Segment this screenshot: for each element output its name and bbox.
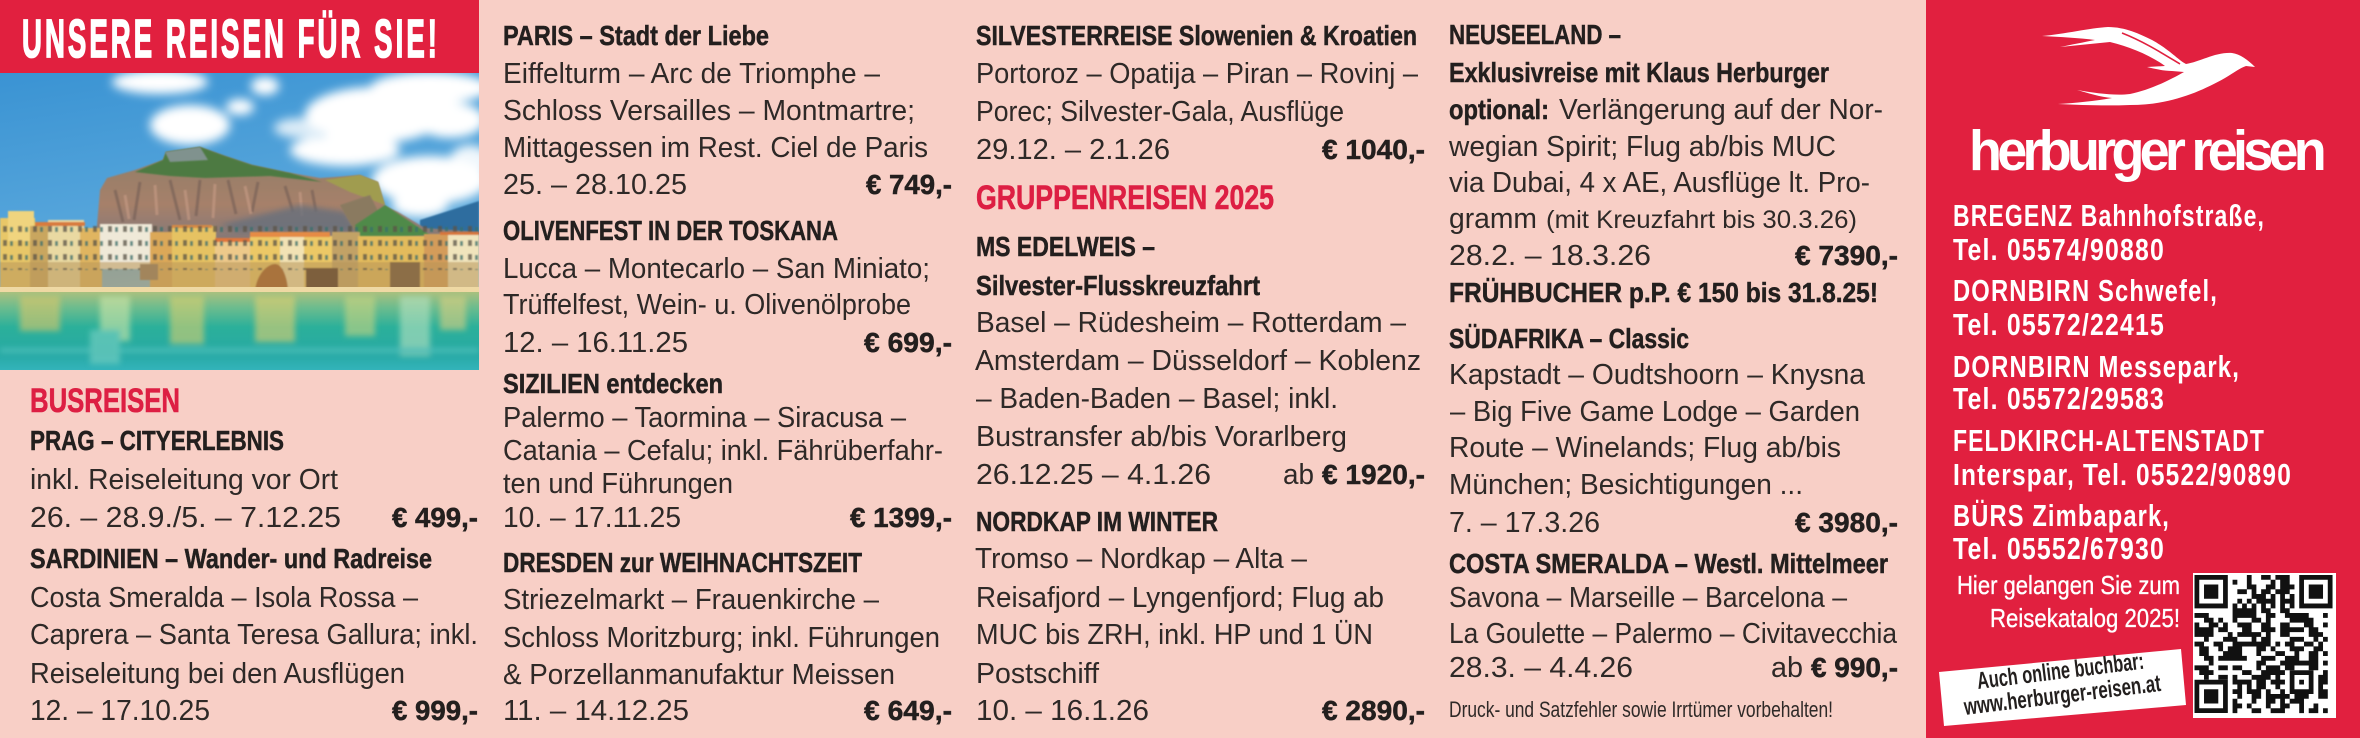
- trip: Neuseeland: € 7390,-: [1795, 240, 1898, 271]
- trip: Sardinien: [30, 543, 478, 727]
- trip: Neuseeland: gramm: [1449, 203, 1537, 235]
- trip: Prag: [30, 425, 478, 534]
- trip: Sardinien: Reiseleitung bei den Ausflügen: [30, 658, 405, 690]
- branch: Dornbirn Messepark: Tel. 05572/29583: [1953, 381, 2165, 416]
- trip: Sardinien: SARDINIEN – Wander- und Radreise: [30, 543, 432, 574]
- trip: MS Edelweis: ab: [1283, 459, 1314, 491]
- trip: Sizilien: Catania – Cefalu; inkl. Fährüberfahr-: [503, 435, 943, 467]
- trip: MS Edelweis: Amsterdam – Düsseldorf – Koblenz: [975, 345, 1421, 377]
- trip: Dresden: & Porzellanmanufaktur Meissen: [503, 659, 895, 691]
- trip: Südafrika: Kapstadt – Oudtshoorn – Knysna: [1449, 359, 1866, 391]
- trip: Paris: [503, 20, 952, 201]
- branch: Bregenz: [1953, 198, 2265, 267]
- trip: MS Edelweis: – Baden-Baden – Basel; inkl.: [976, 383, 1338, 415]
- branch: Bürs: BÜRS Zimbapark,: [1953, 498, 2170, 533]
- trip: Silvesterreise: Portoroz – Opatija – Piran – Rovinj –: [976, 58, 1419, 90]
- trip: Südafrika: € 3980,-: [1795, 507, 1898, 538]
- photo: Cefalù seafront under the cliff: [0, 70, 490, 370]
- branch: Bürs: [1953, 498, 2170, 566]
- logo wordmark: herburger reisen: [1969, 119, 2324, 183]
- branch: Dornbirn Messepark: DORNBIRN Messepark,: [1953, 349, 2240, 384]
- trip: MS Edelweis: MS EDELWEIS –: [976, 231, 1155, 262]
- trip: Costa Smeralda: 28.3. – 4.4.26: [1449, 652, 1633, 684]
- trip: Silvesterreise: SILVESTERREISE Slowenien & Kroatien: [976, 20, 1417, 51]
- catalog note: Hier gelangen Sie zum: [1957, 570, 2180, 600]
- trip: Paris: Eiffelturm – Arc de Triomphe –: [503, 58, 881, 90]
- trip: Olivenfest: OLIVENFEST IN DER TOSKANA: [503, 215, 838, 246]
- trip: MS Edelweis: Bustransfer ab/bis Vorarlberg: [976, 421, 1347, 453]
- trip: Südafrika: – Big Five Game Lodge – Garden: [1450, 396, 1860, 428]
- trip: Neuseeland: wegian Spirit; Flug ab/bis MUC: [1448, 131, 1836, 163]
- trip: Olivenfest: € 699,-: [864, 327, 952, 358]
- trip: Südafrika: Route – Winelands; Flug ab/bis: [1449, 432, 1841, 464]
- trip: Olivenfest: 12. – 16.11.25: [503, 327, 688, 359]
- trip: Nordkap: Tromso – Nordkap – Alta –: [975, 543, 1308, 575]
- trip: Paris: € 749,-: [866, 169, 952, 200]
- trip: Costa Smeralda: ab: [1771, 652, 1803, 684]
- trip: Silvesterreise: 29.12. – 2.1.26: [976, 134, 1170, 166]
- trip: Nordkap: Postschiff: [976, 658, 1100, 690]
- buildings: [0, 218, 35, 290]
- disclaimer: Druck- und Satzfehler sowie Irrtümer vorbehalten!: [1449, 697, 1833, 722]
- QR code: [2193, 573, 2336, 718]
- column 2: [503, 20, 952, 727]
- trip: Sardinien: 12. – 17.10.25: [30, 695, 210, 727]
- trip: Paris: 25. – 28.10.25: [503, 169, 687, 201]
- trip: Prag: PRAG – CITYERLEBNIS: [30, 425, 284, 456]
- trip: Südafrika: [1449, 323, 1898, 539]
- panel: red contact sidebar: [1926, 0, 2360, 738]
- trip: Costa Smeralda: COSTA SMERALDA – Westl. Mittelmeer: [1449, 548, 1888, 579]
- trip: Neuseeland: [1448, 19, 1898, 308]
- trip: Neuseeland: FRÜHBUCHER p.P. € 150 bis 31.8.25!: [1449, 277, 1878, 308]
- trip: Nordkap: NORDKAP IM WINTER: [976, 506, 1218, 537]
- trip: Paris: Mittagessen im Rest. Ciel de Paris: [503, 132, 928, 164]
- trip: Olivenfest: Trüffelfest, Wein- u. Olivenölprobe: [503, 289, 911, 321]
- trip: Sizilien: 10. – 17.11.25: [503, 502, 681, 534]
- branch: Dornbirn Schwefel: [1953, 273, 2218, 342]
- title banner: UNSERE REISEN FÜR SIE!: [22, 9, 440, 69]
- trip: Dresden: 11. – 14.12.25: [503, 695, 689, 727]
- catalog note: Reisekatalog 2025!: [1990, 603, 2180, 633]
- branch: Dornbirn Schwefel: Tel. 05572/22415: [1953, 307, 2165, 342]
- trip: Prag: 26. – 28.9./5. – 7.12.25: [30, 502, 341, 534]
- callout: online booking label: www.herburger-reisen.at: [1962, 670, 2162, 721]
- heading: Gruppenreisen 2025: GRUPPENREISEN 2025: [976, 179, 1274, 217]
- trip: Nordkap: MUC bis ZRH, inkl. HP und 1 ÜN: [976, 619, 1373, 651]
- heading: Busreisen: BUSREISEN: [30, 382, 180, 420]
- trip: Costa Smeralda: Savona – Marseille – Barcelona –: [1449, 582, 1848, 614]
- trip: Neuseeland: (mit Kreuzfahrt bis 30.3.26): [1546, 206, 1857, 234]
- column 1: Busreisen: [30, 382, 478, 727]
- trip: Neuseeland: NEUSEELAND –: [1449, 19, 1621, 50]
- trip: Prag: inkl. Reiseleitung vor Ort: [30, 464, 338, 496]
- trip: Sizilien: SIZILIEN entdecken: [503, 368, 723, 399]
- trip: MS Edelweis: 26.12.25 – 4.1.26: [976, 459, 1211, 491]
- trip: Dresden: [503, 547, 952, 727]
- trip: Silvesterreise: [976, 20, 1425, 166]
- trip: Neuseeland: Verlängerung auf der Nor-: [1559, 94, 1883, 126]
- trip: Neuseeland: via Dubai, 4 x AE, Ausflüge lt. Pro-: [1449, 167, 1870, 199]
- title banner: [0, 0, 479, 73]
- trip: Sardinien: Caprera – Santa Teresa Gallura; inkl.: [30, 619, 478, 651]
- catalog note: [1957, 570, 2180, 633]
- column 4: [1448, 19, 1898, 722]
- branch: Bürs: Tel. 05552/67930: [1953, 531, 2165, 566]
- trip: Nordkap: [975, 506, 1425, 727]
- trip: Costa Smeralda: [1449, 548, 1898, 684]
- trip: MS Edelweis: Silvester-Flusskreuzfahrt: [976, 270, 1260, 301]
- trip: Paris: Schloss Versailles – Montmartre;: [503, 95, 915, 127]
- trip: Dresden: Striezelmarkt – Frauenkirche –: [503, 584, 880, 616]
- trip: Nordkap: 10. – 16.1.26: [976, 695, 1149, 727]
- trip: Olivenfest: [503, 215, 952, 359]
- column 3: [975, 20, 1425, 727]
- trip: Neuseeland: optional:: [1449, 94, 1549, 125]
- trip: Costa Smeralda: € 990,-: [1811, 652, 1898, 683]
- trip: Dresden: Schloss Moritzburg; inkl. Führungen: [503, 622, 940, 654]
- trip: Silvesterreise: € 1040,-: [1322, 134, 1425, 165]
- trip: Südafrika: SÜDAFRIKA – Classic: [1449, 323, 1689, 354]
- trip: Dresden: DRESDEN zur WEIHNACHTSZEIT: [503, 547, 862, 578]
- trip: Costa Smeralda: La Goulette – Palermo – Civitavecchia: [1449, 618, 1898, 650]
- trip: Silvesterreise: Porec; Silvester-Gala, Ausflüge: [976, 96, 1344, 128]
- trip: Nordkap: Reisafjord – Lyngenfjord; Flug ab: [976, 582, 1384, 614]
- icon: herburger bird logo: [2042, 27, 2255, 105]
- trip: Sizilien: [503, 368, 952, 534]
- trip: Südafrika: 7. – 17.3.26: [1449, 507, 1600, 539]
- branch: Dornbirn Schwefel: DORNBIRN Schwefel,: [1953, 273, 2218, 308]
- trip: MS Edelweis: € 1920,-: [1322, 459, 1425, 490]
- trip: Neuseeland: Exklusivreise mit Klaus Herburger: [1449, 57, 1829, 88]
- trip: Sizilien: € 1399,-: [850, 502, 952, 533]
- branch: Dornbirn Messepark: [1953, 349, 2240, 416]
- trip: Dresden: € 649,-: [864, 695, 952, 726]
- trip: Sardinien: Costa Smeralda – Isola Rossa –: [30, 582, 419, 614]
- trip: MS Edelweis: [975, 231, 1425, 491]
- branch: Feldkirch-Altenstadt: [1953, 423, 2292, 492]
- trip: Sardinien: € 999,-: [392, 695, 478, 726]
- trip: Sizilien: ten und Führungen: [503, 468, 733, 500]
- trip: Olivenfest: Lucca – Montecarlo – San Miniato;: [503, 253, 930, 285]
- trip: Nordkap: € 2890,-: [1322, 695, 1425, 726]
- callout: online booking label: Auch online buchbar:: [1975, 648, 2145, 695]
- trip: Südafrika: München; Besichtigungen ...: [1449, 469, 1803, 501]
- branch: Bregenz: Tel. 05574/90880: [1953, 232, 2165, 267]
- trip: Prag: € 499,-: [392, 502, 478, 533]
- trip: Sizilien: Palermo – Taormina – Siracusa –: [503, 402, 907, 434]
- callout: online booking label: [1939, 648, 2186, 726]
- trip: Neuseeland: 28.2. – 18.3.26: [1449, 240, 1651, 272]
- trip: MS Edelweis: Basel – Rüdesheim – Rotterdam –: [976, 307, 1407, 339]
- trip: Paris: PARIS – Stadt der Liebe: [503, 20, 769, 51]
